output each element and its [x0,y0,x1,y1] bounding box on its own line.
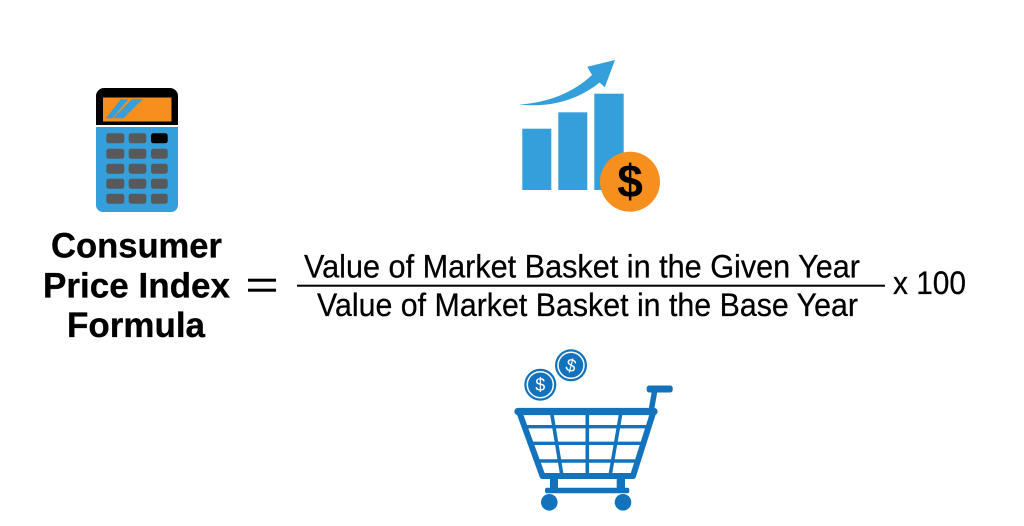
icon: dollar coins: $ [564,355,578,376]
icon: shopping cart with coins [518,349,673,511]
title: Consumer Price Index Formula: Consumer [51,226,222,266]
cart basket [518,389,655,476]
icon: calculator [96,88,178,212]
icon: growth arrow [519,60,615,105]
icon: dollar coins: $ [535,375,545,395]
equals sign [248,279,276,292]
title: Consumer Price Index Formula: Price Index [43,266,231,306]
title: Consumer Price Index Formula: Formula [67,306,206,345]
title: Consumer Price Index Formula [43,226,231,345]
multiplier: x 100: x 100 [893,265,966,301]
formula fraction [297,248,885,323]
denominator: Value of Market Basket in the Base Year [317,287,858,323]
icon: rising bar chart with dollar coin: $ [617,155,643,207]
icon: rising bar chart with dollar coin [519,60,660,212]
numerator: Value of Market Basket in the Given Year [304,248,860,284]
icon: dollar coins [524,349,587,401]
